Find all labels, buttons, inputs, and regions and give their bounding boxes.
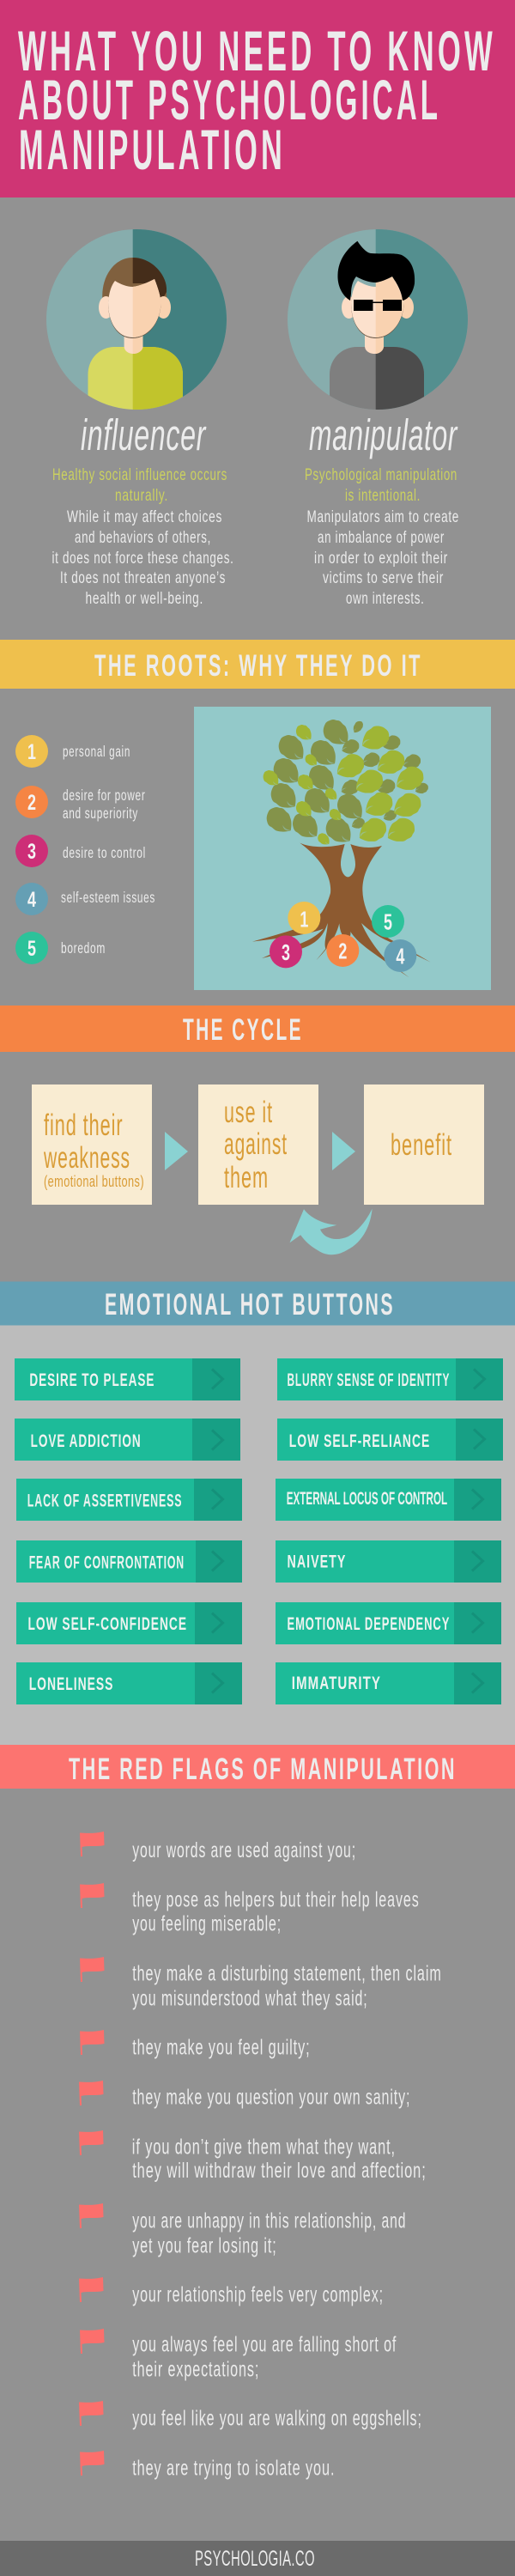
button: emotional dependency (276, 1602, 501, 1644)
legend: reasons list: 2 (27, 791, 36, 815)
flag item 7 (79, 2203, 406, 2257)
numbered circles: 4 (396, 944, 405, 969)
text block: influencer description: it does not force these changes. (52, 549, 233, 568)
button: lack of assertiveness: LACK OF ASSERTIVENESS (27, 1490, 182, 1510)
panel: cycle step 2: against (224, 1127, 288, 1161)
heading: emotional hot buttons (0, 1281, 515, 1326)
button: naivety (276, 1540, 501, 1583)
text block: manipulator description: own interests. (346, 589, 424, 608)
flag item 4 (80, 2030, 311, 2060)
legend: reasons list: desire for power (63, 787, 146, 804)
trunk and roots (252, 843, 431, 977)
text block: influencer description: It does not threaten anyone’s (60, 568, 226, 587)
legend: reasons list: 3 (27, 840, 36, 864)
button: external locus of control (276, 1479, 501, 1521)
button: low self-confidence (16, 1602, 242, 1644)
button: immaturity (276, 1662, 501, 1704)
heading: red flags (0, 1745, 515, 1789)
button: low self-reliance: LOW SELF-RELIANCE (289, 1431, 430, 1451)
text block: manipulator description: in order to exploit their (314, 549, 448, 568)
legend: reasons list: boredom (61, 939, 106, 957)
text block: influencer description: Healthy social influence occurs (52, 465, 227, 484)
flag item 8: your relationship feels very complex; (132, 2283, 384, 2307)
flag item 2 (80, 1883, 420, 1936)
panel: cycle step 2 (198, 1084, 318, 1205)
list: red flags (79, 1832, 442, 2480)
legend: reasons list: 1 (27, 740, 36, 764)
button: immaturity: IMMATURITY (292, 1673, 381, 1693)
numbered circles: 1 (300, 906, 308, 932)
numbered circles: 5 (384, 909, 392, 935)
flag item 4: they make you feel guilty; (132, 2036, 311, 2060)
flag item 2: you feeling miserable; (132, 1912, 282, 1936)
panel: emotional hot buttons (0, 1281, 515, 1745)
text block: manipulator description: victims to serve their (323, 568, 444, 587)
flag item 6 (79, 2130, 427, 2183)
flag item 10 (79, 2401, 422, 2430)
heading: the roots (0, 640, 515, 689)
button: love addiction (15, 1419, 240, 1461)
button: low self-confidence: LOW SELF-CONFIDENCE (27, 1613, 187, 1634)
button: fear of confrontation (16, 1540, 242, 1583)
panel: cycle step 3: benefit (391, 1128, 452, 1162)
panel: cycle step 1 (32, 1084, 152, 1205)
button: desire to please: DESIRE TO PLEASE (29, 1370, 154, 1390)
button: fear of confrontation: FEAR OF CONFRONTATION (29, 1552, 185, 1572)
flag item 9: their expectations; (132, 2357, 259, 2381)
flag item 11: they are trying to isolate you. (132, 2456, 335, 2480)
legend: reasons list: 5 (27, 937, 36, 961)
arrow: curved return (290, 1209, 373, 1255)
title banner: MANIPULATION (19, 118, 286, 181)
flag item 1: your words are used against you; (132, 1838, 356, 1862)
flag item 11 (80, 2451, 335, 2480)
text block: manipulator description (305, 465, 459, 608)
icon: manipulator avatar (288, 223, 475, 416)
button: blurry sense of identity (277, 1358, 503, 1400)
button: naivety: NAIVETY (287, 1552, 346, 1572)
panel: cycle step 3 (364, 1084, 484, 1205)
legend: reasons list: self-esteem issues (61, 889, 155, 906)
button: loneliness (16, 1662, 242, 1704)
panel: tree illustration (194, 707, 491, 990)
legend: reasons list: personal gain (63, 743, 130, 760)
heading: the cycle: THE CYCLE (183, 1013, 303, 1047)
legend: reasons list: 4 (27, 888, 36, 912)
text block: influencer description: and behaviors of others, (75, 528, 211, 547)
text block: manipulator description: an imbalance of power (318, 528, 445, 547)
heading: influencer: influencer (81, 410, 207, 459)
panel: influencer (46, 223, 233, 608)
flag item 1 (80, 1832, 356, 1862)
button: low self-reliance (277, 1419, 503, 1461)
numbered circles: 3 (282, 939, 290, 965)
legend: reasons list: desire to control (63, 844, 146, 861)
title banner (0, 0, 515, 197)
button: loneliness: LONELINESS (29, 1674, 113, 1694)
heading: the cycle (0, 1005, 515, 1052)
button: desire to please (15, 1358, 240, 1400)
button: lack of assertiveness (16, 1479, 242, 1521)
text block: influencer description (52, 465, 233, 608)
button: love addiction: LOVE ADDICTION (31, 1431, 142, 1451)
panel: cycle step 1: find their (44, 1109, 124, 1142)
panel: cycle step 2: use it (224, 1096, 273, 1129)
flag item 9 (80, 2329, 397, 2381)
arrow: step 2 to 3 (332, 1132, 355, 1170)
tree (252, 715, 431, 977)
text block: manipulator description: is intentional. (345, 486, 421, 505)
text block: influencer description: naturally. (115, 486, 168, 505)
footer: PSYCHOLOGIA.CO (195, 2547, 315, 2571)
text block: influencer description: health or well-being. (86, 589, 203, 608)
arrow: step 1 to 2 (165, 1132, 188, 1170)
footer (0, 2541, 515, 2576)
numbered circles: 2 (338, 939, 347, 964)
panel: cycle step 1: (emotional buttons) (44, 1172, 144, 1190)
flag item 7: yet you fear losing it; (132, 2233, 277, 2257)
legend: reasons list: and superiority (63, 805, 138, 822)
leaves (260, 715, 430, 848)
flag item 3: you misunderstood what they said; (132, 1987, 368, 2011)
text block: influencer description: While it may affect choices (67, 507, 222, 526)
panel: cycle step 2: them (224, 1161, 269, 1194)
numbered circles (270, 902, 416, 972)
legend: reasons list (15, 735, 155, 964)
panel: cycle step 1: weakness (43, 1141, 130, 1175)
flag item 5 (79, 2081, 410, 2110)
panel: manipulator (288, 223, 475, 608)
icon: influencer avatar (46, 223, 232, 416)
flag item 3 (80, 1957, 442, 2011)
flag item 8 (79, 2277, 384, 2307)
